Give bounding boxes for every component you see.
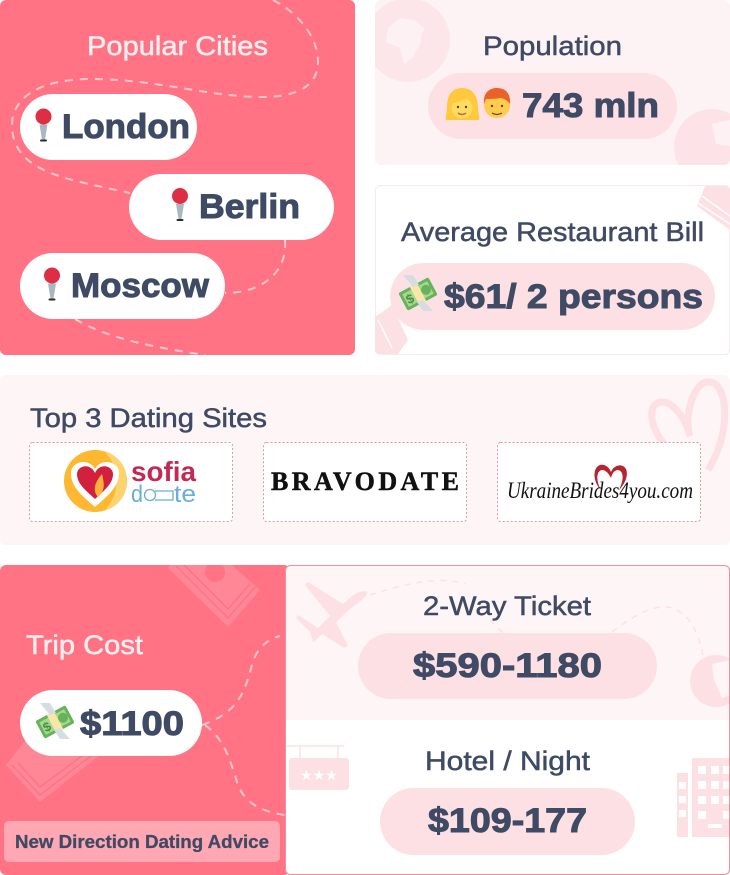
heading: popular cities: Popular Cities xyxy=(87,31,268,61)
heading: population: Population xyxy=(483,31,622,61)
logo card: UkraineBrides4you xyxy=(498,442,700,522)
logo card: UkraineBrides4you: UkraineBrides4you.com xyxy=(507,478,693,503)
logo card: Sofia Date: te xyxy=(174,481,196,508)
banner: source credit: New Direction Dating Advice xyxy=(15,832,269,852)
icon: globe xyxy=(690,655,730,707)
value pill: ticket price: $590-1180 xyxy=(413,647,602,685)
icon: money with wings xyxy=(35,703,75,739)
panel: trip cost xyxy=(0,562,290,875)
value pill: trip cost: $1100 xyxy=(80,705,184,743)
logo card: Sofia Date xyxy=(30,442,232,522)
city pill: Berlin xyxy=(129,174,334,240)
heading: top 3 dating sites: Top 3 Dating Sites xyxy=(30,403,267,433)
value pill: restaurant bill: $61/ 2 persons xyxy=(444,278,703,316)
logo card: Sofia Date: d xyxy=(131,481,143,508)
city pill: Moscow: Moscow xyxy=(71,267,210,305)
logo card: Bravodate xyxy=(264,442,466,522)
city pill: Berlin: Berlin xyxy=(199,188,300,226)
city pill: London: London xyxy=(62,108,190,146)
icon: money with wings xyxy=(398,275,438,311)
icon: hotel building xyxy=(677,758,730,837)
value pill: population xyxy=(428,73,677,139)
value pill: restaurant bill xyxy=(390,263,715,330)
panel: average restaurant bill xyxy=(375,186,730,354)
icon: banknote stack top xyxy=(168,562,260,627)
value pill: trip cost xyxy=(20,690,202,756)
heading: hotel per night: Hotel / Night xyxy=(425,746,591,776)
panel: top 3 dating sites xyxy=(0,375,730,545)
value pill: hotel price xyxy=(380,788,635,855)
icon: woman emoji xyxy=(446,88,479,120)
icon: hotel sign: ★★★ xyxy=(300,767,338,783)
icon: banknote stack bottom xyxy=(6,741,98,802)
icon: man emoji xyxy=(484,88,510,118)
banner: source credit xyxy=(4,821,280,862)
panel: popular cities xyxy=(0,0,355,355)
value pill: ticket price xyxy=(358,633,657,699)
value pill: population: 743 mln xyxy=(522,87,659,125)
panel: population xyxy=(375,0,730,165)
logo card: Sofia Date: sofia xyxy=(131,456,196,487)
heading: trip cost: Trip Cost xyxy=(26,630,144,660)
city pill: Moscow xyxy=(20,253,225,319)
panel: ticket and hotel costs xyxy=(285,565,730,875)
icon: airplane xyxy=(296,582,367,648)
city pill: London xyxy=(20,94,197,160)
value pill: hotel price: $109-177 xyxy=(428,802,587,840)
icon: hotel sign xyxy=(287,746,349,790)
heading: average restaurant bill: Average Restaurant Bill xyxy=(401,217,704,247)
logo card: Bravodate: BRAVODATE xyxy=(271,467,459,496)
icon: heart outline xyxy=(652,382,725,470)
heading: two-way ticket: 2-Way Ticket xyxy=(423,591,592,621)
